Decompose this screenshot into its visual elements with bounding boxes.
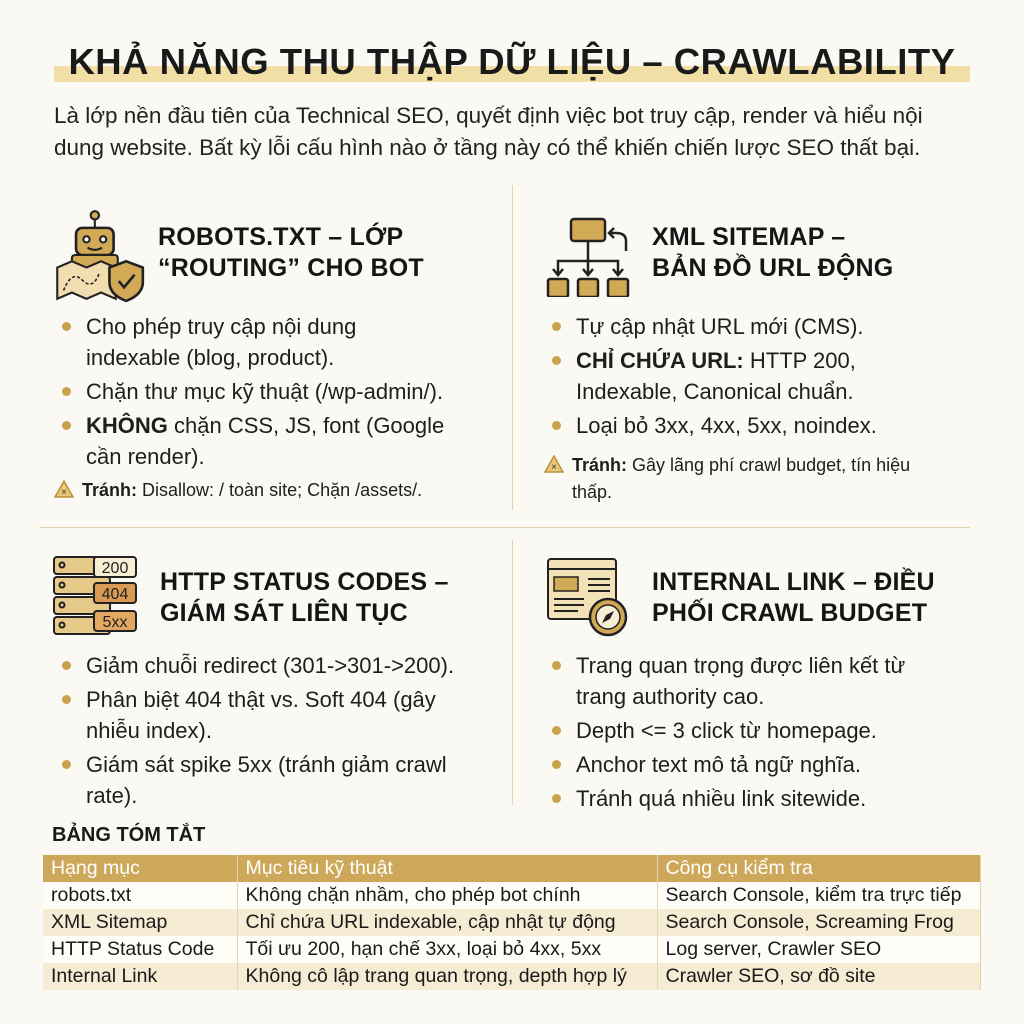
- heading: ROBOTS.TXT – LỚP: [158, 223, 403, 251]
- bullets: [552, 653, 905, 811]
- heading: XML SITEMAP –: [652, 223, 845, 251]
- warning: Tránh: Gây lãng phí crawl budget, tín hiệu thấp.: [572, 455, 910, 502]
- panel: internal link: [547, 558, 935, 811]
- heading: [158, 222, 424, 282]
- heading: HTTP STATUS CODES –: [160, 568, 449, 596]
- icon: robot with map and shield: [56, 210, 144, 302]
- intro text: Là lớp nền đầu tiên của Technical SEO, quyết định việc bot truy cập, render và hiểu nội dung website. Bất kỳ lỗi cấu hình nào ở tầng này có thể khiến chiến lược SEO thất bại.: [54, 103, 923, 160]
- bullets: Depth <= 3 click từ homepage.: [576, 718, 877, 743]
- panel: robots.txt: [54, 210, 444, 500]
- bullets: [62, 314, 444, 469]
- summary table: Chỉ chứa URL indexable, cập nhật tự động: [246, 911, 616, 933]
- bullets: Tự cập nhật URL mới (CMS).: [576, 314, 864, 339]
- heading: [652, 568, 935, 627]
- summary table: HTTP Status Code: [51, 938, 214, 960]
- bullets: [552, 314, 877, 438]
- bullets: Loại bỏ 3xx, 4xx, 5xx, noindex.: [576, 413, 877, 438]
- summary table: Công cụ kiểm tra: [666, 857, 813, 879]
- bullets: Cho phép truy cập nội dung indexable (blog, product).: [86, 314, 356, 370]
- summary table: Không cô lập trang quan trọng, depth hợp lý: [246, 965, 627, 987]
- summary table: Tối ưu 200, hạn chế 3xx, loại bỏ 4xx, 5xx: [246, 938, 601, 960]
- heading: BẢN ĐỒ URL ĐỘNG: [652, 254, 893, 282]
- heading: INTERNAL LINK – ĐIỀU: [652, 568, 935, 596]
- bullets: CHỈ CHỨA URL: HTTP 200, Indexable, Canonical chuẩn.: [576, 348, 856, 404]
- heading: [652, 223, 893, 282]
- summary table: Internal Link: [51, 965, 157, 987]
- table heading: BẢNG TÓM TẮT: [52, 824, 205, 846]
- summary table: Hạng mục: [51, 857, 140, 879]
- icon: webpage with compass: [547, 558, 628, 636]
- summary table: [43, 855, 981, 990]
- warning: ×: [551, 462, 557, 473]
- summary table: Mục tiêu kỹ thuật: [246, 857, 393, 879]
- icon: server stack with codes: [53, 556, 137, 635]
- bullets: Phân biệt 404 thật vs. Soft 404 (gây nhiễu index).: [86, 687, 436, 743]
- bullets: Chặn thư mục kỹ thuật (/wp-admin/).: [86, 379, 443, 404]
- bullets: Trang quan trọng được liên kết từ trang authority cao.: [576, 653, 905, 709]
- summary table: Search Console, Screaming Frog: [666, 911, 954, 933]
- summary table: XML Sitemap: [51, 911, 167, 933]
- icon: server stack with codes: 404: [102, 586, 128, 603]
- bullets: Anchor text mô tả ngữ nghĩa.: [576, 752, 861, 777]
- summary table: Search Console, kiểm tra trực tiếp: [666, 884, 961, 906]
- bullets: Giám sát spike 5xx (tránh giảm crawl rate).: [86, 752, 447, 808]
- heading: PHỐI CRAWL BUDGET: [652, 599, 927, 627]
- summary table: Log server, Crawler SEO: [666, 938, 881, 960]
- summary table: robots.txt: [51, 884, 131, 906]
- heading: GIÁM SÁT LIÊN TỤC: [160, 599, 408, 627]
- panel: HTTP status codes: [53, 556, 454, 808]
- icon: server stack with codes: 200: [102, 560, 128, 577]
- bullets: [62, 653, 454, 808]
- warning: Tránh: Disallow: / toàn site; Chặn /assets/.: [82, 480, 422, 500]
- heading: [160, 568, 449, 627]
- summary table: Không chặn nhầm, cho phép bot chính: [246, 884, 581, 906]
- bullets: Giảm chuỗi redirect (301->301->200).: [86, 653, 454, 678]
- summary table: Crawler SEO, sơ đồ site: [666, 965, 876, 987]
- heading: “ROUTING” CHO BOT: [158, 254, 424, 282]
- bullets: KHÔNG chặn CSS, JS, font (Google cần render).: [86, 413, 444, 469]
- bullets: Tránh quá nhiều link sitewide.: [576, 786, 866, 811]
- warning: ×: [61, 487, 67, 498]
- icon: sitemap: [546, 218, 630, 297]
- icon: server stack with codes: 5xx: [103, 614, 127, 631]
- title: KHẢ NĂNG THU THẬP DỮ LIỆU – CRAWLABILITY: [68, 41, 956, 82]
- panel: XML sitemap: [544, 218, 910, 502]
